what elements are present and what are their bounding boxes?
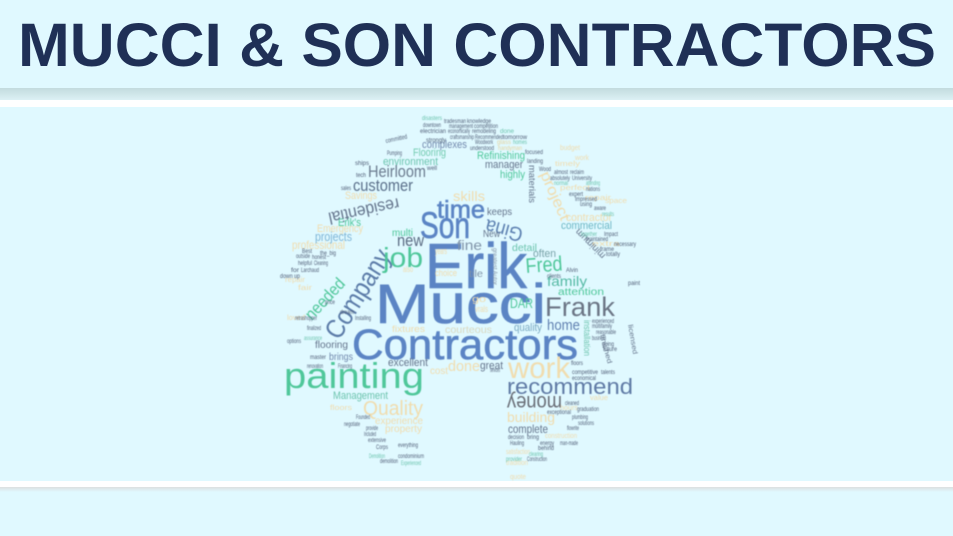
grey and slate words: installation bbox=[582, 320, 592, 356]
tan words: construction bbox=[545, 433, 577, 440]
small dark words: Cleaning bbox=[314, 260, 328, 267]
small dark words: provide bbox=[366, 425, 378, 432]
grey and slate words: materials bbox=[527, 165, 537, 204]
small dark words: down up bbox=[280, 273, 300, 280]
small dark words: downtown bbox=[423, 122, 441, 129]
large green words: environment bbox=[383, 156, 438, 168]
tan words: hours bbox=[560, 405, 579, 412]
grey and slate words: new bbox=[397, 231, 425, 250]
small dark words: Best bbox=[302, 248, 312, 255]
small dark words: cleaned bbox=[565, 400, 579, 407]
tan words: fair bbox=[298, 285, 313, 292]
small dark words: bring bbox=[527, 434, 539, 441]
small dark words: man-made bbox=[560, 440, 578, 447]
grey and slate words: often bbox=[533, 248, 556, 260]
header band bbox=[0, 0, 953, 88]
tan words: repair bbox=[585, 195, 612, 202]
small dark words: Experienced bbox=[401, 460, 421, 467]
small dark words: finalized bbox=[307, 325, 321, 332]
grey and slate words: residential bbox=[327, 194, 401, 228]
small dark words: extensive bbox=[368, 437, 386, 444]
tan words: work bbox=[507, 352, 571, 385]
small dark words: paint bbox=[628, 280, 640, 287]
large green words: Management bbox=[333, 390, 388, 402]
tan words: Emergency bbox=[317, 223, 363, 235]
small dark words: dream bbox=[340, 309, 354, 316]
large green words: Refinishing bbox=[477, 150, 525, 162]
small dark words: remodeling bbox=[472, 128, 496, 135]
large green words: detail bbox=[512, 243, 537, 254]
large blue words: Son bbox=[420, 205, 470, 246]
large green words: DAR bbox=[510, 295, 533, 311]
small dark words: landing bbox=[527, 158, 543, 165]
small dark words: helpful bbox=[298, 260, 312, 267]
tan words: skills bbox=[453, 188, 485, 204]
grey and slate words: minimum bbox=[573, 226, 608, 261]
small dark words: everything bbox=[398, 442, 418, 449]
large green words: multi bbox=[392, 228, 413, 239]
tan words: work bbox=[574, 155, 589, 162]
small dark words: provider bbox=[506, 456, 523, 463]
large green words bbox=[284, 147, 604, 402]
tan words: tradition bbox=[506, 460, 528, 467]
grey and slate words: greatest Autor bbox=[491, 248, 498, 286]
small dark words: management bbox=[449, 123, 473, 130]
small dark words: Larchaud bbox=[301, 267, 319, 274]
small dark words: behind bbox=[538, 445, 554, 452]
small dark words: results bbox=[602, 211, 614, 218]
small dark words: Impact bbox=[604, 231, 618, 238]
small dark words: necessary bbox=[614, 241, 637, 248]
small dark words: totally bbox=[606, 251, 621, 258]
small dark words: exceptional bbox=[547, 409, 571, 416]
small dark words: maintained bbox=[586, 236, 608, 243]
small dark words: Installing bbox=[355, 315, 371, 322]
small dark words: clients bbox=[547, 273, 562, 280]
large green words: family bbox=[547, 273, 587, 289]
small dark words: attending bbox=[586, 180, 600, 187]
grey and slate words: excellent bbox=[388, 357, 428, 369]
small dark words: together bbox=[581, 231, 598, 238]
small dark words: sales bbox=[341, 185, 351, 192]
large green words: Fred bbox=[525, 252, 563, 278]
large blue words: home bbox=[547, 317, 580, 334]
small dark words: aware bbox=[594, 205, 606, 212]
large blue words bbox=[319, 196, 580, 369]
grey and slate words: licensed bbox=[626, 324, 638, 355]
small dark words: tech bbox=[356, 172, 366, 179]
small dark words: normal bbox=[554, 180, 568, 187]
tan words: cost bbox=[430, 366, 448, 377]
small dark words: retrashopper bbox=[295, 315, 317, 322]
small dark words: economical bbox=[572, 375, 596, 382]
tan words: repair bbox=[285, 277, 306, 284]
small dark words: focused bbox=[525, 149, 543, 156]
tan words: professional bbox=[292, 238, 345, 252]
small dark words: Construction bbox=[527, 456, 547, 463]
tan words: choice bbox=[435, 268, 457, 278]
word cloud panel bbox=[0, 107, 953, 481]
large blue words: Company bbox=[319, 243, 397, 344]
small dark words: multifamily bbox=[592, 323, 612, 330]
small dark words: honest bbox=[312, 254, 326, 261]
tan words: property bbox=[385, 424, 422, 435]
small dark words: future bbox=[603, 346, 617, 353]
large blue words: Mucci bbox=[375, 272, 546, 335]
small dark words: competitive bbox=[572, 369, 598, 376]
small dark words: disasters bbox=[422, 115, 443, 122]
large green words: painting bbox=[284, 355, 424, 396]
grey and slate words: flooring bbox=[315, 340, 348, 351]
small dark words: expert bbox=[569, 191, 583, 198]
small dark words: reasonable bbox=[596, 329, 616, 336]
tan words: project bbox=[536, 169, 573, 224]
tan words: satisfaction bbox=[506, 449, 530, 456]
tan words: go bbox=[472, 294, 486, 304]
small dark words: ships bbox=[355, 160, 370, 167]
small dark words: done bbox=[500, 128, 514, 135]
large blue words: Contractors bbox=[352, 321, 578, 369]
small dark words: options bbox=[287, 338, 301, 345]
large green words: highly bbox=[500, 169, 525, 181]
grey and slate words: complexes bbox=[422, 139, 467, 151]
small dark words: glass bbox=[497, 139, 512, 146]
small dark words: using bbox=[580, 201, 592, 208]
grey and slate words bbox=[315, 139, 638, 436]
grey and slate words: money bbox=[507, 391, 562, 414]
small dark words: assurance bbox=[304, 335, 322, 342]
tan words bbox=[285, 145, 627, 481]
tan words: perfect bbox=[560, 185, 590, 192]
tan words: extra bbox=[592, 241, 620, 248]
tan words: done bbox=[448, 358, 480, 375]
tan words: floors bbox=[330, 405, 353, 412]
small dark words bbox=[280, 115, 640, 467]
small dark words: Alvin bbox=[566, 267, 578, 274]
grey and slate words: projects bbox=[315, 229, 352, 244]
grey and slate words: customer bbox=[353, 176, 413, 195]
grey and slate words: finished bbox=[598, 334, 613, 365]
large blue words: Erik bbox=[425, 230, 528, 302]
grey and slate words: keeps bbox=[487, 207, 512, 218]
small dark words: frame bbox=[600, 246, 614, 253]
tan words: space bbox=[605, 198, 627, 205]
small dark words: energy bbox=[540, 440, 555, 447]
grey and slate words: great bbox=[480, 360, 503, 372]
small dark words: Founded bbox=[356, 414, 370, 421]
tan words: budget bbox=[560, 145, 580, 152]
grey and slate words: manager bbox=[485, 159, 523, 171]
small dark words: Financing bbox=[338, 363, 352, 370]
small dark words: reclaim bbox=[570, 169, 584, 176]
small dark words: economically bbox=[448, 128, 470, 135]
grey and slate words: tile bbox=[469, 269, 483, 280]
small dark words: Pumping bbox=[387, 150, 402, 157]
grey and slate words: recommend bbox=[507, 374, 633, 399]
tan words: fixtures bbox=[392, 324, 426, 334]
small dark words: nations bbox=[586, 186, 600, 193]
small dark words: knowledge bbox=[467, 118, 491, 125]
small dark words: renovation bbox=[307, 363, 323, 370]
small dark words: master bbox=[310, 354, 327, 361]
small dark words: the_big bbox=[320, 250, 336, 257]
large blue words: time bbox=[437, 196, 485, 224]
small dark words: going bbox=[602, 341, 614, 348]
small dark words: talents bbox=[601, 369, 616, 376]
small dark words: graduation bbox=[577, 406, 599, 413]
title: MUCCI & SON CONTRACTORS bbox=[18, 11, 936, 79]
small dark words: Hauling bbox=[510, 440, 524, 447]
small dark words: almost bbox=[554, 169, 568, 176]
small dark words: tomorrow bbox=[503, 134, 527, 141]
grey and slate words: brings bbox=[329, 352, 353, 363]
small dark words: flowrite bbox=[567, 425, 579, 432]
tan words: years bbox=[435, 246, 447, 256]
large green words: attention bbox=[558, 287, 604, 298]
small dark words: University bbox=[572, 175, 593, 182]
large green words: needed bbox=[301, 274, 349, 324]
small dark words: plumbing bbox=[572, 414, 588, 421]
small dark words: electrician bbox=[420, 128, 446, 135]
tan words: courteous bbox=[445, 325, 492, 336]
small dark words: floors bbox=[571, 360, 584, 367]
small dark words: condominium bbox=[398, 453, 424, 460]
small dark words: strongly bbox=[426, 137, 447, 144]
grey and slate words: New bbox=[483, 229, 501, 240]
tan words: value bbox=[590, 395, 608, 402]
small dark words: Woodwork bbox=[475, 139, 493, 146]
grey and slate words: quality bbox=[514, 322, 542, 334]
small dark words: business bbox=[592, 335, 606, 342]
tan words: building bbox=[507, 409, 555, 425]
large green words: job bbox=[382, 242, 423, 273]
small dark words: for bbox=[291, 267, 300, 274]
small dark words: committed bbox=[385, 133, 408, 145]
tan words: loved bbox=[287, 315, 305, 322]
small dark words: clearing bbox=[529, 451, 543, 458]
grey and slate words: fine bbox=[457, 237, 482, 253]
small dark words: tradesman bbox=[444, 118, 466, 125]
large green words: Erik's bbox=[338, 217, 361, 229]
tan words: contractor bbox=[566, 212, 612, 224]
large green words: Flooring bbox=[413, 147, 446, 159]
grey and slate words: commercial bbox=[561, 220, 612, 232]
small dark words: Corps bbox=[376, 444, 389, 451]
tan words: quote bbox=[510, 474, 526, 481]
small dark words: homes bbox=[513, 139, 528, 146]
small dark words: solutions bbox=[578, 420, 594, 427]
tan words: vrals bbox=[475, 304, 488, 314]
small dark words: craftsmanship bbox=[450, 134, 474, 141]
small dark words: absolutely bbox=[550, 175, 571, 182]
tan words: experience bbox=[375, 416, 423, 427]
small dark words: competition bbox=[474, 123, 498, 130]
grey and slate words: complete bbox=[508, 422, 548, 436]
small dark words: Demolition bbox=[369, 453, 385, 460]
small dark words: price bbox=[325, 299, 335, 306]
grey and slate words: Heirloom bbox=[368, 162, 426, 181]
grey and slate words: Frank bbox=[545, 292, 615, 322]
tan words: Savings bbox=[345, 190, 377, 202]
tan words: timely bbox=[555, 161, 581, 168]
small dark words: Impressed bbox=[575, 196, 597, 203]
small dark words: services bbox=[490, 367, 500, 374]
tan words: Quality bbox=[363, 398, 423, 420]
small dark words: handyman bbox=[498, 145, 522, 152]
small dark words: decision bbox=[508, 434, 524, 441]
small dark words: outside bbox=[296, 253, 310, 260]
small dark words: Recommended bbox=[475, 134, 503, 141]
small dark words: negotiate bbox=[344, 421, 360, 428]
tan words: also bbox=[403, 265, 413, 274]
small dark words: Included bbox=[364, 431, 376, 438]
large blue words: Gina bbox=[482, 214, 525, 245]
small dark words: well bbox=[426, 165, 437, 172]
small dark words: understood bbox=[470, 145, 494, 152]
small dark words: Wood bbox=[539, 166, 551, 173]
small dark words: experienced bbox=[592, 318, 614, 325]
small dark words: demolition bbox=[380, 458, 398, 465]
